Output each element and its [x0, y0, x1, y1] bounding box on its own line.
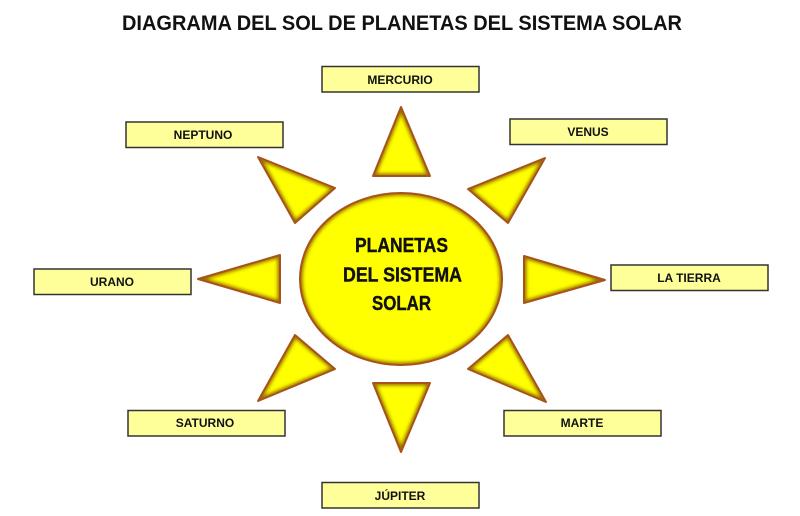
sun centre circle: DEL SISTEMA [343, 264, 462, 286]
sun diagram [198, 107, 605, 452]
label: Venus: VENUS [567, 125, 609, 139]
sun centre circle: PLANETAS [355, 235, 448, 257]
ray: bottom right [468, 335, 546, 402]
ray: top right [468, 158, 545, 223]
label: Mercurio: MERCURIO [367, 73, 433, 87]
ray: top [373, 107, 430, 176]
ray: top left [258, 157, 335, 223]
sun centre circle [300, 193, 502, 365]
label: Urano: URANO [90, 275, 134, 289]
label: Marte: MARTE [561, 416, 603, 430]
label: La Tierra: LA TIERRA [657, 271, 721, 285]
label: Urano [34, 269, 191, 294]
label: Saturno: SATURNO [176, 416, 234, 430]
ray: bottom [373, 383, 430, 452]
label: Marte [504, 410, 661, 436]
ray: right [524, 256, 605, 303]
label: Neptuno [126, 122, 283, 148]
sun centre circle: SOLAR [372, 293, 431, 315]
ray: bottom left [258, 335, 335, 401]
title: DIAGRAMA DEL SOL DE PLANETAS DEL SISTEMA SOLAR [122, 11, 682, 35]
label: Saturno [128, 410, 285, 436]
label: Júpiter [322, 482, 479, 508]
label: La Tierra [611, 265, 768, 290]
ray: left [198, 255, 280, 303]
label: Neptuno: NEPTUNO [174, 128, 232, 142]
label: Venus [510, 119, 667, 144]
label: Júpiter: JÚPITER [375, 488, 426, 503]
label: Mercurio [322, 66, 479, 92]
